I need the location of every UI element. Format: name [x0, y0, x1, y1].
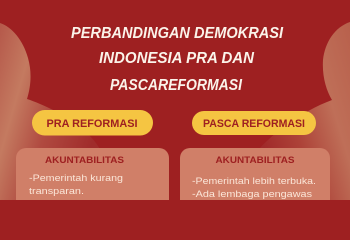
title: PERBANDINGAN DEMOKRASI: [71, 25, 284, 42]
title: INDONESIA PRA DAN: [99, 50, 255, 67]
card: akuntabilitas pra: transparan.: [29, 186, 84, 197]
heading pill: pra reformasi: [32, 110, 153, 136]
heading pill: pra reformasi: PRA REFORMASI: [46, 118, 138, 130]
card: akuntabilitas pasca: -Ada lembaga pengawas: [192, 189, 312, 200]
card: akuntabilitas pra: -Pemerintah kurang: [29, 173, 123, 184]
card: akuntabilitas pasca: [180, 148, 330, 200]
card: akuntabilitas pasca: -Pemerintah lebih terbuka.: [192, 176, 316, 187]
panel: pra reformasi: [16, 110, 169, 200]
title: PASCAREFORMASI: [110, 77, 243, 94]
heading pill: pasca reformasi: PASCA REFORMASI: [203, 118, 305, 130]
card: akuntabilitas pra: AKUNTABILITAS: [45, 155, 124, 166]
silhouette: left head: [0, 23, 101, 200]
panel: pasca reformasi: [180, 111, 330, 200]
title: [71, 25, 284, 94]
card: akuntabilitas pasca: AKUNTABILITAS: [216, 155, 294, 166]
silhouette: right head: [258, 22, 350, 200]
card: akuntabilitas pra: [16, 148, 169, 200]
heading pill: pasca reformasi: [192, 111, 316, 135]
